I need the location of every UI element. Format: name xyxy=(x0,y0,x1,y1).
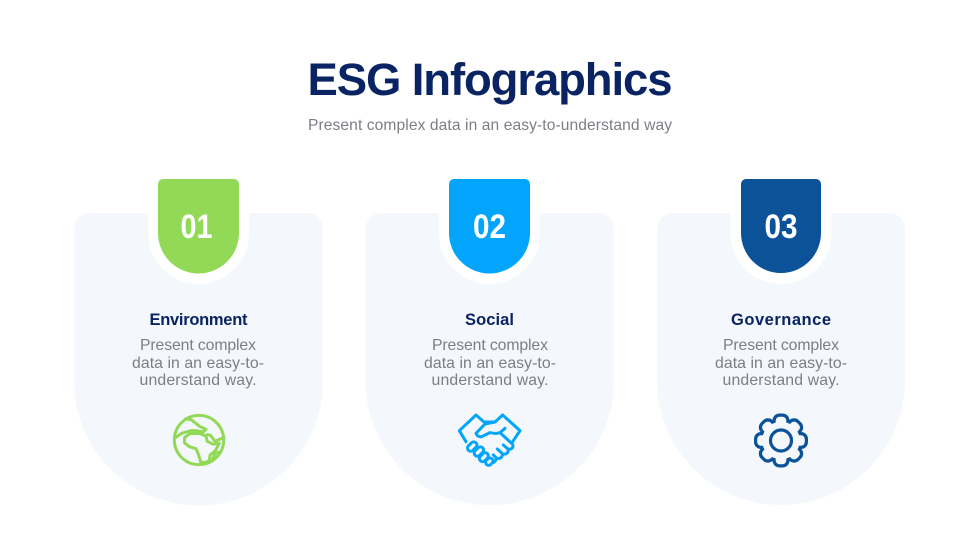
text: social description xyxy=(424,337,556,389)
text: governance description xyxy=(715,337,847,389)
badge cutout: environment xyxy=(148,200,249,284)
icon: handshake xyxy=(459,415,520,467)
panel: social xyxy=(366,179,614,505)
number: 03: 03 xyxy=(764,208,798,246)
badge cutout: governance xyxy=(730,200,832,284)
badge cutout: social xyxy=(439,200,540,284)
card background: governance xyxy=(657,213,905,505)
card background: environment xyxy=(74,213,323,505)
text: social description: data in an easy-to- xyxy=(424,355,556,372)
text: governance description: understand way. xyxy=(722,372,840,389)
text: environment description: understand way. xyxy=(140,372,256,389)
text: social description: Present complex xyxy=(432,337,548,354)
text: environment description xyxy=(132,337,264,389)
text: environment description: data in an easy-to- xyxy=(132,355,264,372)
badge: 02 xyxy=(449,179,530,274)
text: social description: understand way. xyxy=(432,372,548,389)
heading: governance: Governance xyxy=(731,311,831,329)
badge: 01 xyxy=(158,179,239,274)
heading: social: Social xyxy=(465,311,514,329)
heading: environment: Environment xyxy=(150,311,248,329)
title: ESG Infographics xyxy=(308,54,672,105)
panel: governance xyxy=(657,179,905,505)
badge: 03 xyxy=(741,179,821,273)
text: environment description: Present complex xyxy=(140,337,256,354)
card background: social xyxy=(366,213,614,505)
text: governance description: Present complex xyxy=(723,337,839,354)
number: 02: 02 xyxy=(473,208,506,246)
icon: globe xyxy=(174,415,224,465)
panel: environment xyxy=(74,179,323,505)
text: governance description: data in an easy-to- xyxy=(715,355,847,372)
number: 01: 01 xyxy=(180,208,212,246)
icon: gear xyxy=(754,414,808,468)
subtitle: Present complex data in an easy-to-understand way xyxy=(308,117,672,134)
